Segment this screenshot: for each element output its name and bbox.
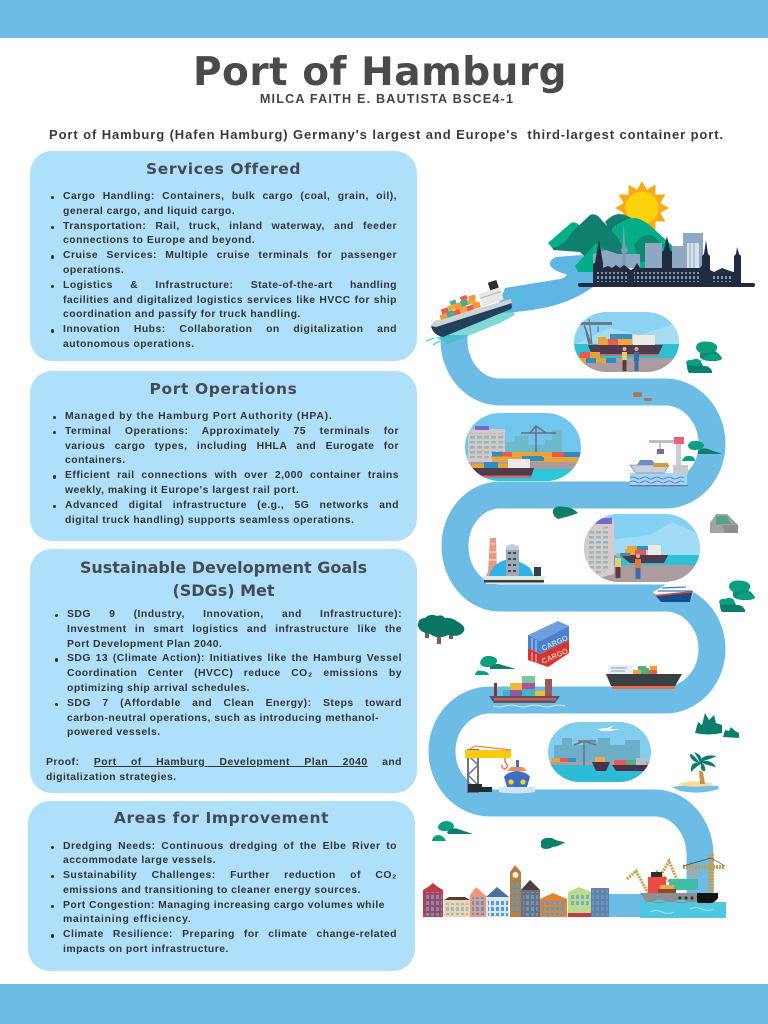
text: improvement list: Dredging Needs: Continuous dredging of the Elbe River to [63,840,397,852]
text: operations list: weekly, making it Europe's largest rail port. [65,485,299,496]
author line: MILCA FAITH E. BAUTISTA BSCE4-1 [260,92,514,106]
heading: services offered: Services Offered [146,160,301,178]
text: operations list: containers. [65,455,126,466]
bushes: lower left [432,821,473,841]
text: services list: Cruise Services: Multiple cruise terminals for passenger [63,250,397,261]
text: services list: connections to Europe and beyond. [63,235,255,246]
text: services list: Innovation Hubs: Collaboration on digitalization and [63,324,397,335]
heading: port operations: Port Operations [150,380,297,398]
text: SDG list: SDG 9 (Industry, Innovation, and Infrastructure): [67,609,402,620]
trees [418,615,464,644]
heading: sustainable development goals [80,558,367,600]
text: SDG list: optimizing ship arrival schedules. [67,683,250,694]
bottom banner [0,984,768,1024]
text: SDG list: SDG 7 (Affordable and Clean Energy): Steps toward [67,698,402,709]
bushes: spiky right [695,713,739,738]
text: improvement list: Climate Resilience: Preparing for climate change-related [63,929,397,940]
icon: palm island [672,752,719,793]
text: improvement list [51,840,397,955]
heading: areas for improvement: Areas for Improvement [114,809,329,827]
icon: harbour crane and ship [630,437,688,486]
text: operations list: Efficient rail connections with over 2,000 container trains [65,470,399,481]
text: operations list: Managed by the Hamburg Port Authority (HPA). [65,411,333,422]
icon: harbour tower ship [483,538,545,584]
text: improvement list: Sustainability Challenges: Further reduction of CO₂ [63,870,397,881]
icon: small blue boat [499,760,535,794]
text: operations list [53,411,399,526]
top banner [0,0,768,38]
text: SDG list: Investment in smart logistics and infrastructure like the [67,624,402,635]
heading: sustainable development goals: (SDGs) Met [172,581,275,600]
text: services list: operations. [63,265,124,276]
bush: lower centre [541,838,565,849]
text: services list: general cargo, and liquid cargo. [63,206,235,217]
text: services list: autonomous operations. [63,339,195,350]
icon: cargo containers: CARGO [540,633,569,653]
intro sentence: Port of Hamburg (Hafen Hamburg) Germany's largest and Europe's third-largest container port. [49,126,724,142]
scene: skyline port oval [548,722,651,782]
text: services list: Logistics & Infrastructure: State-of-the-art handling [63,280,397,291]
text: SDG list: SDG 13 (Climate Action): Initiatives like the Hamburg Vessel [67,653,402,664]
text: improvement list: maintaining efficiency. [63,914,192,925]
text: proof note: digitalization strategies. [46,772,177,783]
icon: barge with colourful containers [489,676,565,707]
title: Port of Hamburg [193,50,567,95]
town row [423,865,609,917]
skyline [578,223,755,287]
icon: cruise ship [653,581,694,602]
text: services list: Transportation: Rail, truck, inland waterway, and feeder [63,221,397,232]
text: SDG list: Port Development Plan 2040. [67,639,222,650]
text: operations list: Advanced digital infrastructure (e.g., 5G networks and [65,500,399,511]
icon: container ship main [426,280,525,345]
scene: port city oval [465,413,582,481]
icon: yellow crane [465,746,511,792]
text: SDG list: powered vessels. [67,727,161,738]
bushes: right of cruise ship [719,580,755,612]
panel: sustainable development goals [30,549,417,793]
scene: workers by port building oval [584,514,700,582]
text: improvement list: accommodate large vessels. [63,855,216,866]
text: operations list: various cargo types, including HHLA and Eurogate for [65,441,399,452]
icon: container ship right [606,665,682,689]
river [442,255,712,917]
icon: rock outcrop [710,514,738,533]
text: operations list: Terminal Operations: Approximately 75 terminals for [65,426,399,437]
icon: cargo containers [528,621,569,667]
text: services list: facilities and digitalized logistics services like HVCC for ship [63,295,397,306]
panel: services offered [30,151,417,361]
heading: sustainable development goals: Sustainable Development Goals [80,558,367,577]
text: improvement list: impacts on port infrastructure. [63,944,229,955]
bushes: right of first oval [686,341,722,373]
text: improvement list: Port Congestion: Managing increasing cargo volumes while [63,900,385,911]
text: SDG list: Coordination Center (HVCC) reduce CO₂ emissions by [67,668,402,679]
scene: port workers oval [574,312,679,372]
text: proof note: Proof: Port of Hamburg Development Plan 2040 and [46,757,402,768]
text: services list: Cargo Handling: Containers, bulk cargo (coal, grain, oil), [63,191,397,202]
text: improvement list: emissions and transitioning to cleaner energy sources. [63,885,361,896]
text: SDG list [55,609,402,738]
panel: port operations [30,371,417,541]
icon: end port with ship and cranes [627,854,726,918]
text: services list: coordination and passify for truck handling. [63,309,301,320]
bushes: left of barge [475,656,516,675]
text: SDG list: carbon-neutral operations, such as introducing methanol- [67,713,379,724]
text: services list [51,191,397,350]
bushes: beside crane [682,441,722,461]
icon: cargo containers: CARGO [540,646,569,666]
icon: sun [615,181,669,235]
mountains [548,214,697,272]
text: proof note [46,757,402,783]
icon: rocks on river [633,392,652,401]
text: operations list: digital truck handling) supports seamless operations. [65,515,354,526]
bush: under river bend [553,506,578,519]
panel: areas for improvement [28,801,415,971]
